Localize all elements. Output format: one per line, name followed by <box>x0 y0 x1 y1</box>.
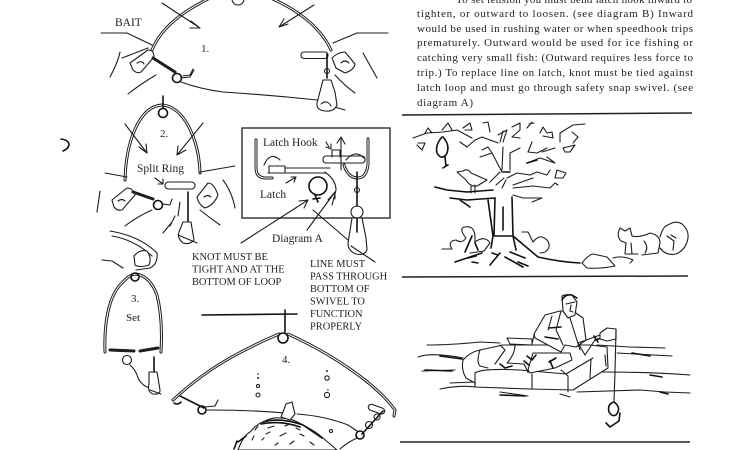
line 6: trip.) To replace line on latch, knot must be tied against <box>417 67 693 79</box>
tree scene <box>413 122 688 268</box>
eyelet <box>278 333 288 343</box>
split ring and snap swivel <box>301 52 337 111</box>
line note: PROPERLY <box>310 322 363 332</box>
line and hook <box>606 330 620 427</box>
trunk <box>488 197 516 250</box>
left hand <box>101 33 156 94</box>
eyelet <box>158 96 168 118</box>
label split ring: Split Ring <box>137 163 184 175</box>
line note: SWIVEL TO <box>310 296 365 308</box>
latch, ring and chain <box>133 182 197 244</box>
pointer lines below box <box>241 192 348 243</box>
line 3: would be used in rushing water or when speedhook trips <box>417 23 693 35</box>
spring wire arch <box>152 0 331 50</box>
step number 2: 2. <box>160 128 168 140</box>
rule below raft scene <box>400 441 690 443</box>
rule above tree scene <box>402 113 692 115</box>
frame <box>242 128 390 218</box>
left wire <box>256 140 272 178</box>
loop ring <box>309 177 327 195</box>
fishing line <box>181 82 345 110</box>
roots and trailing line <box>490 236 580 267</box>
step number 1: 1. <box>201 43 210 55</box>
label BAIT: BAIT <box>115 17 142 29</box>
step number 4: 4. <box>282 354 290 366</box>
diagram 2: split ring <box>97 96 235 244</box>
rock <box>582 254 633 268</box>
knot <box>313 195 320 202</box>
diagram 3: set position <box>102 231 162 394</box>
right wire <box>344 139 368 178</box>
swivel snap below box <box>348 218 375 262</box>
diagram 1: bait position <box>101 0 388 111</box>
water lines <box>418 342 690 397</box>
pointer arrows <box>286 142 336 205</box>
knot note: BOTTOM OF LOOP <box>192 277 282 288</box>
instruction paragraph <box>417 0 694 109</box>
pointer to split ring <box>155 178 163 184</box>
motion marks <box>256 370 330 398</box>
snap swivel <box>148 357 161 394</box>
knot note: TIGHT AND AT THE <box>192 264 285 276</box>
arch <box>105 274 162 352</box>
left latch <box>174 396 218 414</box>
right latch and swivel <box>356 403 385 439</box>
swivel chain <box>351 172 363 218</box>
line 4: prematurely. Outward would be used for ice fishing or <box>417 37 693 49</box>
squirrel <box>618 222 688 255</box>
latch and hook <box>153 58 194 82</box>
squeeze arrows <box>162 3 314 28</box>
step number 3: 3. <box>131 293 140 305</box>
line to fish <box>207 410 357 449</box>
raft fishing scene <box>418 295 690 427</box>
bird <box>457 170 487 193</box>
diagram 4: sprung with fish <box>173 310 395 450</box>
arch <box>125 105 200 180</box>
arch <box>173 334 395 416</box>
line note: PASS THROUGH <box>310 272 388 282</box>
latch and line <box>110 348 158 388</box>
eyelet <box>131 273 139 281</box>
line note: LINE MUST <box>310 259 366 270</box>
small bushes at tree base <box>442 227 549 263</box>
line 8: diagram A) <box>417 97 473 109</box>
label set: Set <box>126 312 140 324</box>
right hand <box>197 166 235 225</box>
line note: FUNCTION <box>310 309 363 320</box>
rule below tree scene <box>402 276 688 277</box>
line 7: latch loop and must go through safety snap swivel. (see <box>417 82 693 94</box>
left hand <box>97 173 152 226</box>
drop line <box>284 310 286 332</box>
diagram A caption: Diagram A <box>272 233 323 245</box>
branches and foliage <box>413 122 585 207</box>
hand holding line <box>600 328 616 341</box>
knot note: KNOT MUST BE <box>192 252 268 263</box>
line 2: tighten, or outward to loosen. (see diagram B) Inward <box>417 8 694 20</box>
fisherman head <box>562 295 577 318</box>
fish <box>234 402 337 450</box>
line note: BOTTOM OF <box>310 284 370 295</box>
hanging speedhook in branch <box>437 137 448 168</box>
label latch: Latch <box>260 189 286 201</box>
fisherman body <box>507 311 602 368</box>
latch bar and eyes <box>264 150 365 173</box>
right hand <box>332 33 388 93</box>
line 5: catching very small fish: (Outward requires less force to <box>417 52 694 64</box>
diagram A: latch detail box <box>242 128 390 218</box>
top eyelet <box>232 0 244 5</box>
label latch hook: Latch Hook <box>263 137 318 149</box>
raft <box>462 345 608 392</box>
fisherman thighs <box>528 353 572 373</box>
arrows <box>125 123 203 155</box>
main line <box>202 314 297 315</box>
stray margin mark <box>61 139 69 151</box>
upward arrow <box>337 137 345 170</box>
hand <box>102 231 157 270</box>
